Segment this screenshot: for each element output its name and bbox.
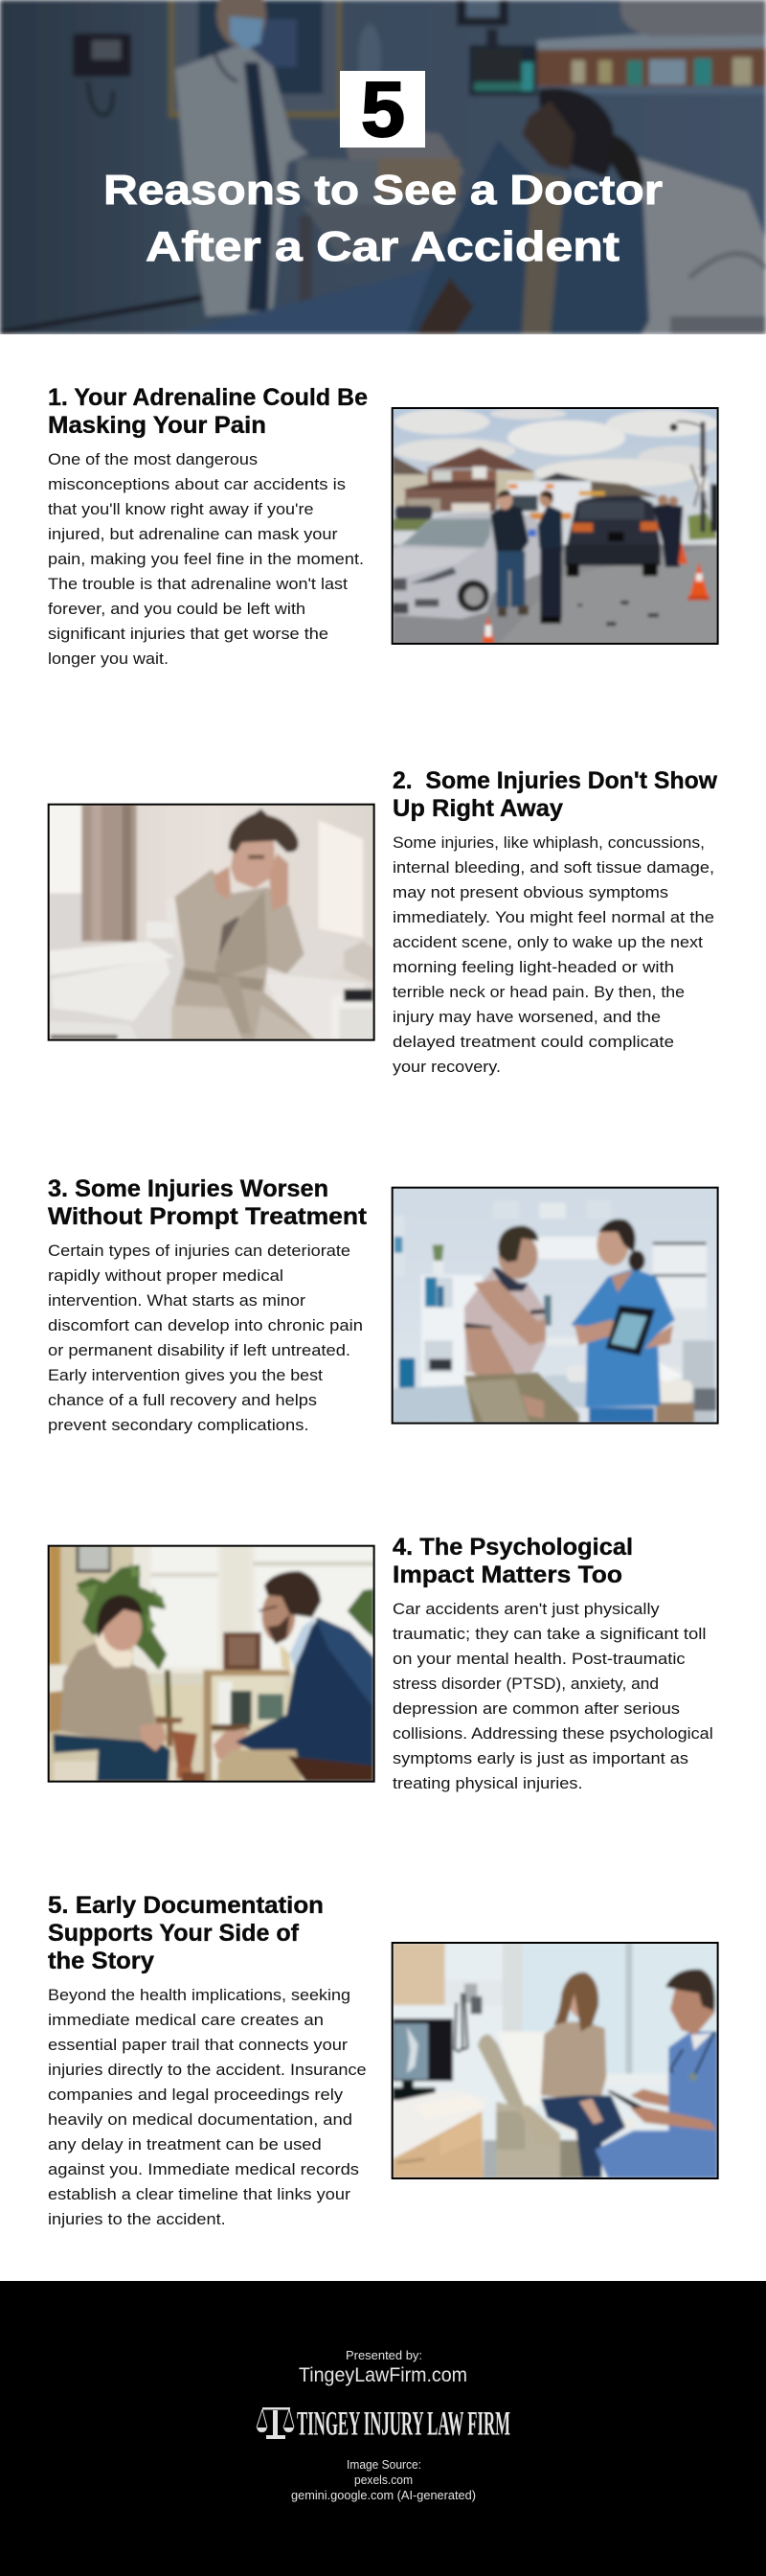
- panel: reason 1: [48, 384, 723, 668]
- presented by credit: Presented by:: [346, 2348, 422, 2362]
- text block: reason 2: terrible neck or head pain. By then, the: [393, 983, 685, 1001]
- text block: reason 4: symptoms early is just as important as: [393, 1749, 688, 1767]
- image source credits: [291, 2458, 476, 2502]
- panel: reason 3: [48, 1175, 723, 1434]
- text block: reason 5: essential paper trail that connects your: [48, 2036, 348, 2054]
- heading: reason 1: [48, 384, 368, 439]
- text block: reason 1: that you'll know right away if you're: [48, 500, 314, 518]
- panel: hero header: [0, 0, 766, 334]
- text block: reason 5: [48, 1986, 367, 2228]
- heading: reason 3: 3. Some Injuries Worsen: [48, 1175, 328, 1202]
- text block: reason 5: injuries directly to the accident. Insurance: [48, 2061, 367, 2079]
- text block: reason 3: Certain types of injuries can deteriorate: [48, 1242, 350, 1260]
- heading: reason 4: Impact Matters Too: [393, 1562, 622, 1588]
- text block: reason 3: rapidly without proper medical: [48, 1266, 283, 1285]
- text block: reason 1: pain, making you feel fine in the moment.: [48, 550, 364, 568]
- text block: reason 4: traumatic; they can take a significant toll: [393, 1625, 707, 1643]
- text block: reason 5: any delay in treatment can be used: [48, 2135, 322, 2154]
- panel: reason 5: [48, 1892, 723, 2228]
- image frame: [393, 1943, 718, 2178]
- heading: reason 5: Supports Your Side of: [48, 1920, 300, 1947]
- panel: reason 2: [44, 767, 718, 1076]
- photo: counselor talking with woman in neck brace: [44, 1542, 379, 1788]
- photo: doctor reviewing tablet with patient: [388, 1939, 723, 2184]
- number badge: 5: 5: [361, 66, 405, 153]
- icon: scales of justice: [257, 2407, 294, 2439]
- text block: reason 4: depression are common after serious: [393, 1699, 680, 1718]
- text block: reason 1: One of the most dangerous: [48, 450, 258, 468]
- image source credits: Image Source:: [347, 2458, 421, 2472]
- heading: reason 2: [393, 767, 718, 822]
- text block: reason 2: your recovery.: [393, 1058, 501, 1076]
- image frame: [49, 1546, 374, 1782]
- heading: reason 5: the Story: [48, 1948, 154, 1974]
- text block: reason 4: on your mental health. Post-traumatic: [393, 1650, 686, 1668]
- text block: reason 3: [48, 1242, 363, 1434]
- heading: reason 5: 5. Early Documentation: [48, 1892, 324, 1919]
- text block: reason 4: [393, 1600, 713, 1792]
- text block: reason 2: immediately. You might feel normal at the: [393, 908, 714, 926]
- text block: reason 5: companies and legal proceedings rely: [48, 2086, 344, 2104]
- heading: reason 1: 1. Your Adrenaline Could Be: [48, 384, 368, 411]
- text block: reason 3: discomfort can develop into chronic pain: [48, 1316, 363, 1334]
- hero background photo: doctor and patient: [0, 0, 766, 334]
- text block: reason 1: [48, 450, 364, 668]
- text block: reason 2: injury may have worsened, and the: [393, 1008, 661, 1026]
- heading: reason 2: 2. Some Injuries Don't Show: [393, 767, 718, 794]
- presented by credit: [299, 2348, 467, 2386]
- image frame: [393, 408, 718, 644]
- text block: reason 5: against you. Immediate medical records: [48, 2160, 359, 2178]
- text block: reason 1: injured, but adrenaline can mask your: [48, 525, 338, 543]
- text block: reason 1: misconceptions about car accidents is: [48, 475, 346, 493]
- photo: man in robe holding head and neck: [44, 801, 379, 1046]
- panel: footer: [0, 2281, 766, 2576]
- text block: reason 3: or permanent disability if left untreated.: [48, 1341, 350, 1359]
- title: After a Car Accident: [146, 223, 620, 270]
- text block: reason 3: intervention. What starts as minor: [48, 1291, 305, 1310]
- text block: reason 5: establish a clear timeline that links your: [48, 2185, 350, 2203]
- image source credits: gemini.google.com (AI-generated): [291, 2489, 476, 2502]
- heading: reason 4: [393, 1534, 633, 1588]
- text block: reason 5: injuries to the accident.: [48, 2210, 226, 2228]
- heading: reason 4: 4. The Psychological: [393, 1534, 633, 1561]
- panel: footer: TINGEY INJURY LAW FIRM: [297, 2405, 510, 2443]
- text block: reason 4: collisions. Addressing these psychological: [393, 1724, 713, 1743]
- title: Reasons to See a Doctor: [103, 167, 663, 214]
- heading: reason 5: [48, 1892, 324, 1974]
- text block: reason 3: chance of a full recovery and helps: [48, 1391, 317, 1409]
- logo: Tingey Injury Law Firm: [257, 2405, 510, 2443]
- image frame: [49, 805, 374, 1040]
- photo: nurse showing x-ray tablet to patient: [388, 1184, 723, 1429]
- text block: reason 1: forever, and you could be left with: [48, 600, 305, 618]
- text block: reason 1: The trouble is that adrenaline won't last: [48, 575, 348, 593]
- text block: reason 1: significant injuries that get worse the: [48, 625, 328, 643]
- image source credits: pexels.com: [354, 2473, 413, 2487]
- text block: reason 2: accident scene, only to wake up the next: [393, 933, 703, 951]
- text block: reason 5: heavily on medical documentation, and: [48, 2110, 352, 2129]
- text block: reason 2: delayed treatment could complicate: [393, 1033, 674, 1051]
- title: [103, 167, 663, 270]
- text block: reason 2: internal bleeding, and soft tissue damage,: [393, 858, 714, 877]
- photo: accident scene with police: [388, 404, 723, 647]
- text block: reason 2: morning feeling light-headed or with: [393, 958, 674, 976]
- presented by credit: TingeyLawFirm.com: [299, 2364, 467, 2386]
- text block: reason 1: longer you wait.: [48, 650, 169, 668]
- heading: reason 1: Masking Your Pain: [48, 412, 266, 439]
- heading: reason 2: Up Right Away: [393, 795, 563, 822]
- text block: reason 2: [393, 833, 714, 1076]
- image frame: [393, 1188, 718, 1424]
- panel: reason 4: [44, 1534, 713, 1792]
- text block: reason 4: treating physical injuries.: [393, 1774, 582, 1792]
- text block: reason 3: Early intervention gives you the best: [48, 1366, 323, 1384]
- text block: reason 4: stress disorder (PTSD), anxiety, and: [393, 1675, 659, 1693]
- number badge: 5: [340, 66, 425, 153]
- text block: reason 3: prevent secondary complications.: [48, 1416, 308, 1434]
- text block: reason 5: Beyond the health implications, seeking: [48, 1986, 350, 2004]
- text block: reason 2: may not present obvious symptoms: [393, 883, 668, 901]
- text block: reason 2: Some injuries, like whiplash, concussions,: [393, 833, 705, 852]
- text block: reason 4: Car accidents aren't just physically: [393, 1600, 660, 1618]
- heading: reason 3: [48, 1175, 368, 1230]
- text block: reason 5: immediate medical care creates an: [48, 2011, 324, 2029]
- heading: reason 3: Without Prompt Treatment: [48, 1203, 368, 1230]
